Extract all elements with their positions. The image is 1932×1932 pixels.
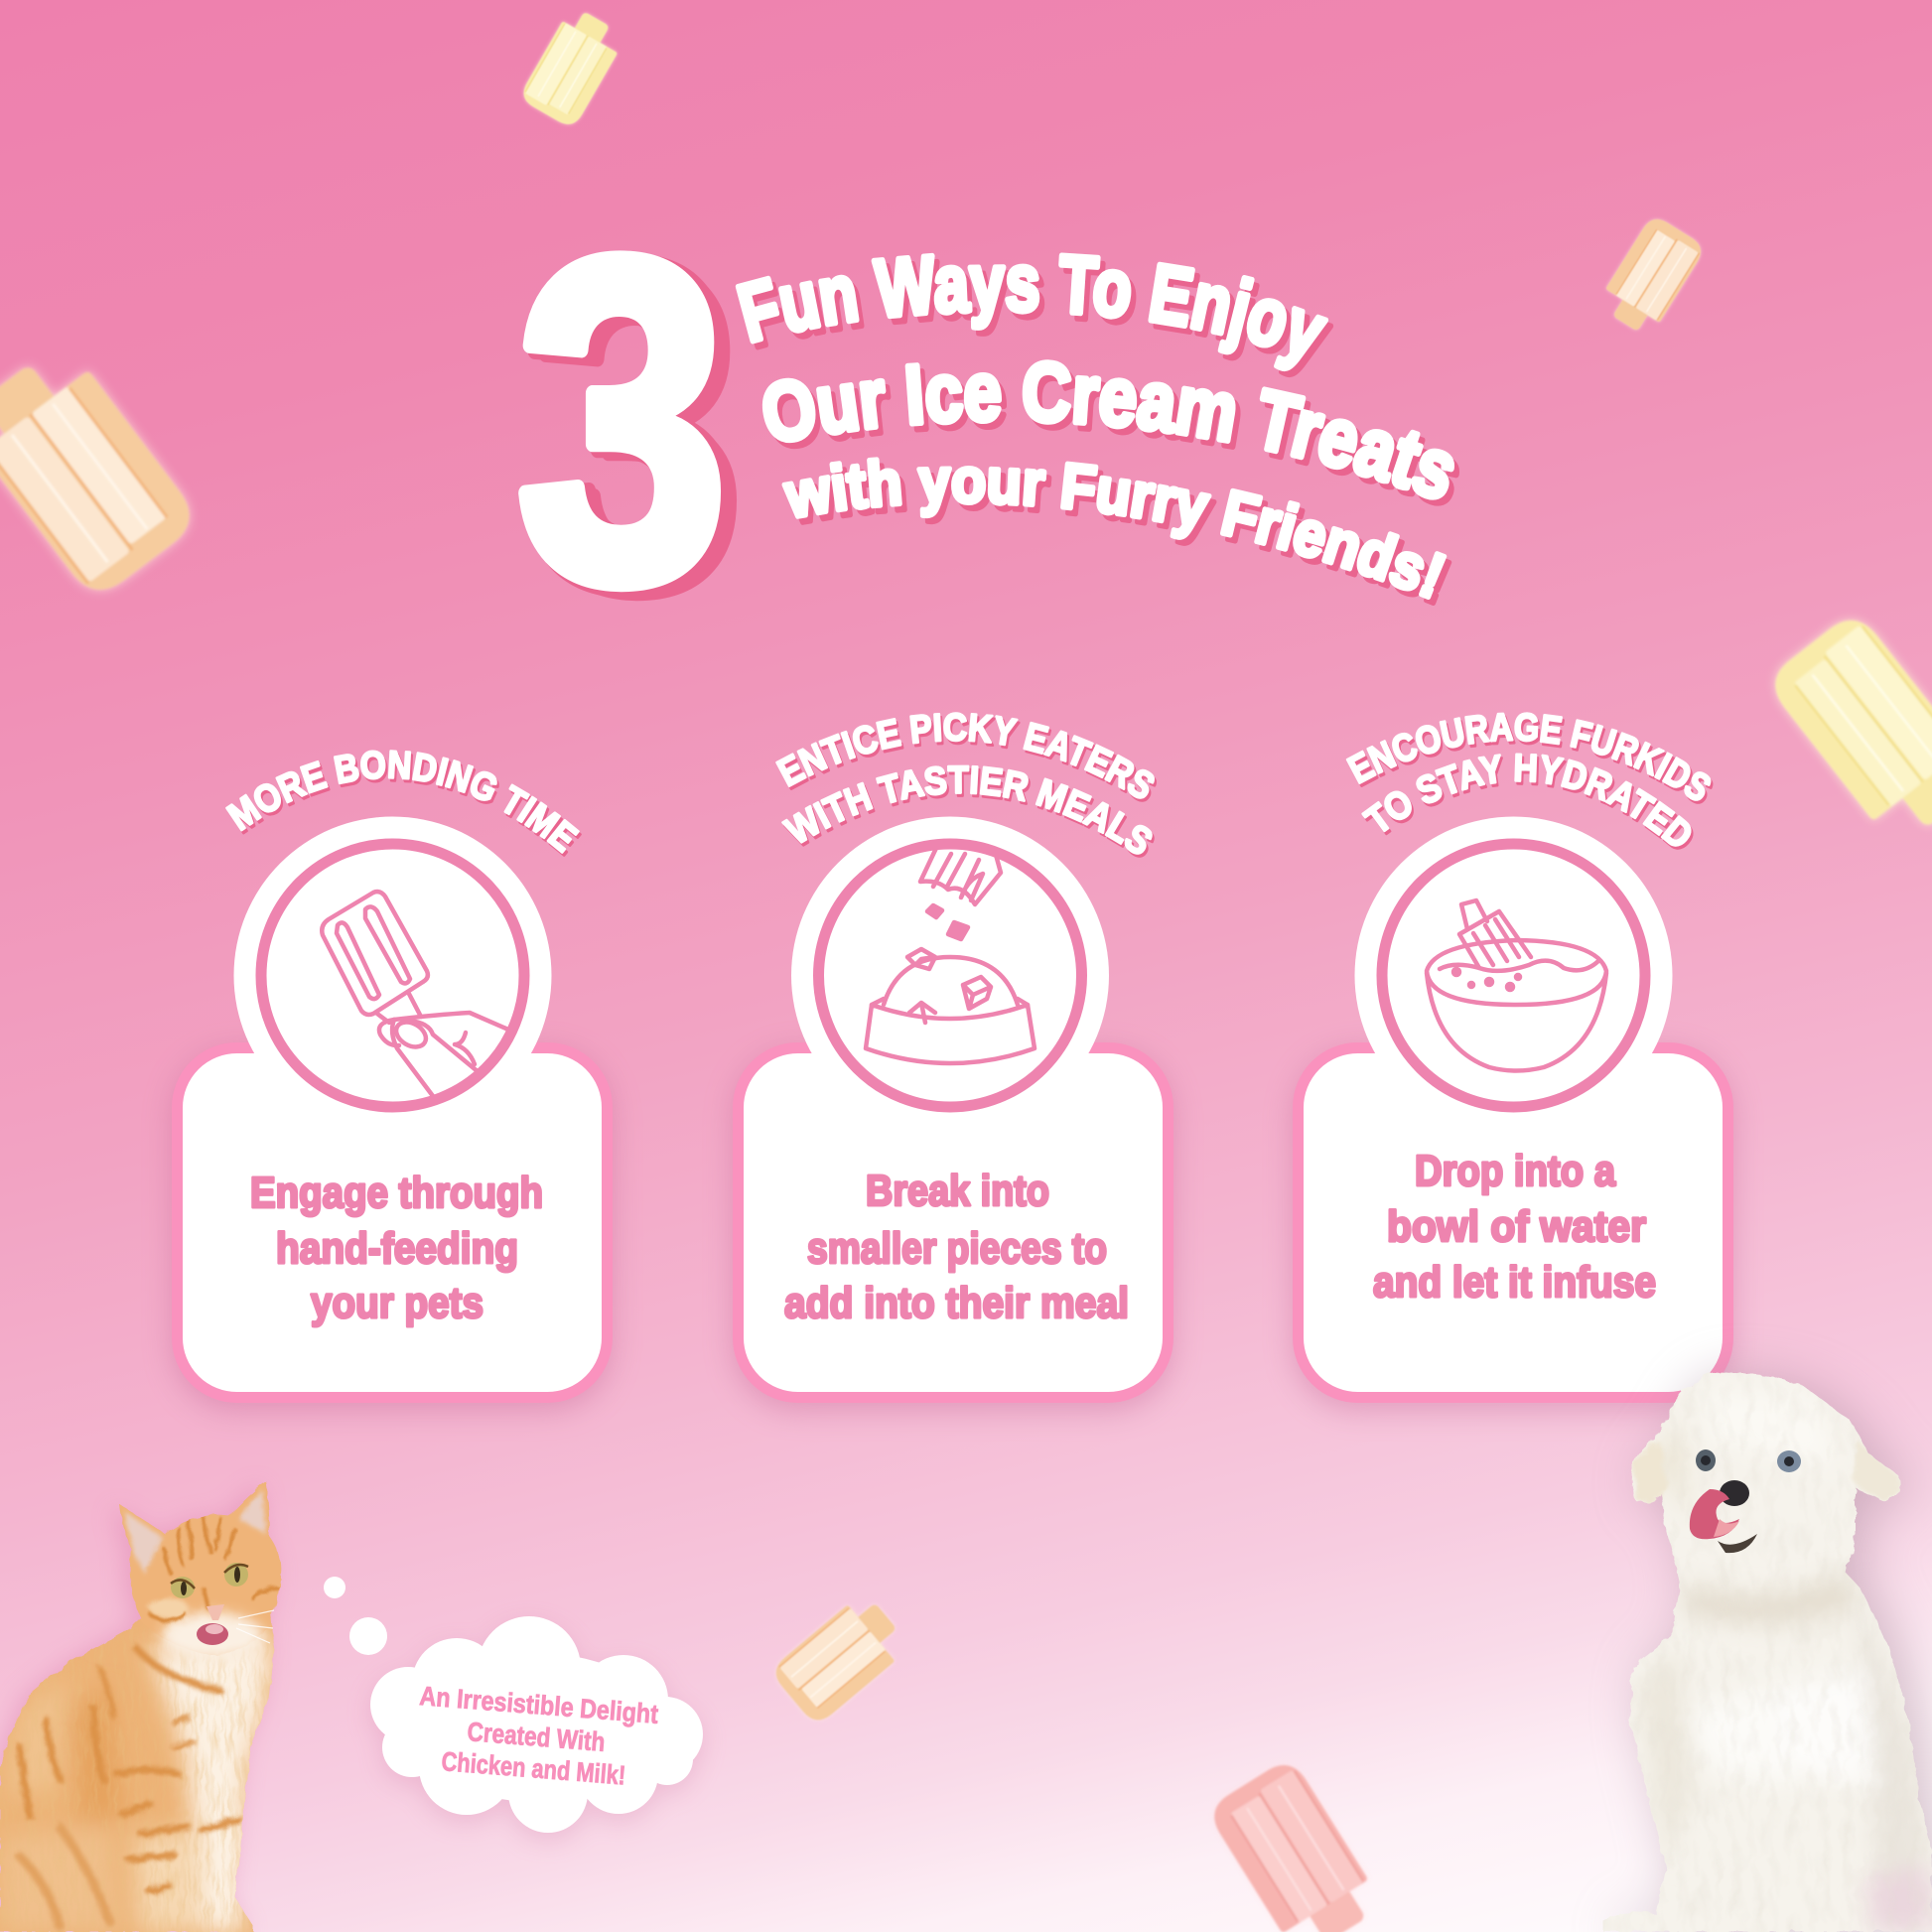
panel 2 badge [791, 816, 1109, 1134]
cloud text: Created With [467, 1717, 606, 1757]
panel 2 card [739, 1048, 1168, 1398]
panel 3 text: Drop into a [1415, 1147, 1615, 1195]
panel: more bonding time [163, 750, 621, 1421]
popsicle: top right orange [1595, 213, 1707, 339]
large thought dot [349, 1617, 387, 1655]
panel 1 heading: MORE BONDING TIME [225, 750, 582, 857]
panel 3 text: and let it infuse [1373, 1258, 1656, 1307]
panel 3 text: bowl of water [1387, 1202, 1646, 1251]
panel 1 text: hand-feeding [276, 1224, 518, 1273]
popsicle: right yellow [1763, 609, 1932, 851]
thought bubble [324, 1577, 703, 1833]
panel 1 badge [234, 816, 552, 1134]
panel 2 heading: WITH TASTIER MEALS [781, 764, 1155, 858]
cloud shape [370, 1616, 703, 1833]
panel 3 heading: ENCOURAGE FURKIDS [1346, 712, 1714, 804]
cat soft shadow [0, 1483, 274, 1932]
panel 1 text: Engage through [250, 1169, 543, 1217]
popsicle: top small yellow [518, 5, 627, 130]
title numeral 3: 3 [516, 164, 728, 676]
panel 3 card [1299, 1048, 1727, 1398]
cat face features [171, 1563, 274, 1645]
popsicle: bottom pink [1205, 1756, 1385, 1932]
small thought dot [324, 1577, 345, 1598]
title line 1: Fun Ways To Enjoy [735, 252, 1334, 377]
panel 3 heading [1346, 712, 1714, 850]
panel 1 text: your pets [311, 1279, 483, 1327]
cloud text: Chicken and Milk! [441, 1746, 626, 1791]
cat photo illustration [0, 1469, 298, 1932]
cloud text: An Irresistible Delight [419, 1681, 659, 1729]
popsicle: top left peach [0, 338, 203, 603]
panel 2 text: smaller pieces to [807, 1224, 1107, 1273]
panel 3 text [1373, 1147, 1656, 1307]
panel 1 card [177, 1048, 608, 1398]
panel 3 ring [1382, 844, 1645, 1107]
panel 2 heading [775, 712, 1157, 858]
panel 2 text [784, 1167, 1129, 1327]
panel 3 heading: TO STAY HYDRATED [1361, 753, 1694, 850]
panel 2 text: Break into [866, 1167, 1049, 1215]
panel 1 ring [261, 844, 524, 1107]
panel 1 text [250, 1169, 543, 1327]
panel 3 badge [1354, 816, 1672, 1134]
icon: popsicle held by hand [322, 892, 508, 1096]
dog face features [1690, 1449, 1801, 1553]
panel: entice picky eaters [724, 712, 1183, 1421]
popsicle: bottom centre orange [769, 1590, 911, 1727]
title block [516, 164, 1459, 676]
panel 2 text: add into their meal [784, 1279, 1129, 1327]
panel: encourage furkids [1283, 712, 1744, 1422]
title line 3: with your Furry Friends! [782, 457, 1451, 606]
title line 2: Our Ice Cream Treats [762, 359, 1459, 506]
icon: treat pieces falling into food bowl [866, 844, 1035, 1063]
dog photo illustration [1588, 1360, 1932, 1932]
icon: popsicle in bowl of water [1427, 900, 1606, 1070]
dog soft shadow [1615, 1375, 1932, 1932]
cloud text [419, 1681, 659, 1791]
panel 2 ring [818, 844, 1082, 1107]
panel 2 heading: ENTICE PICKY EATERS [775, 712, 1157, 802]
